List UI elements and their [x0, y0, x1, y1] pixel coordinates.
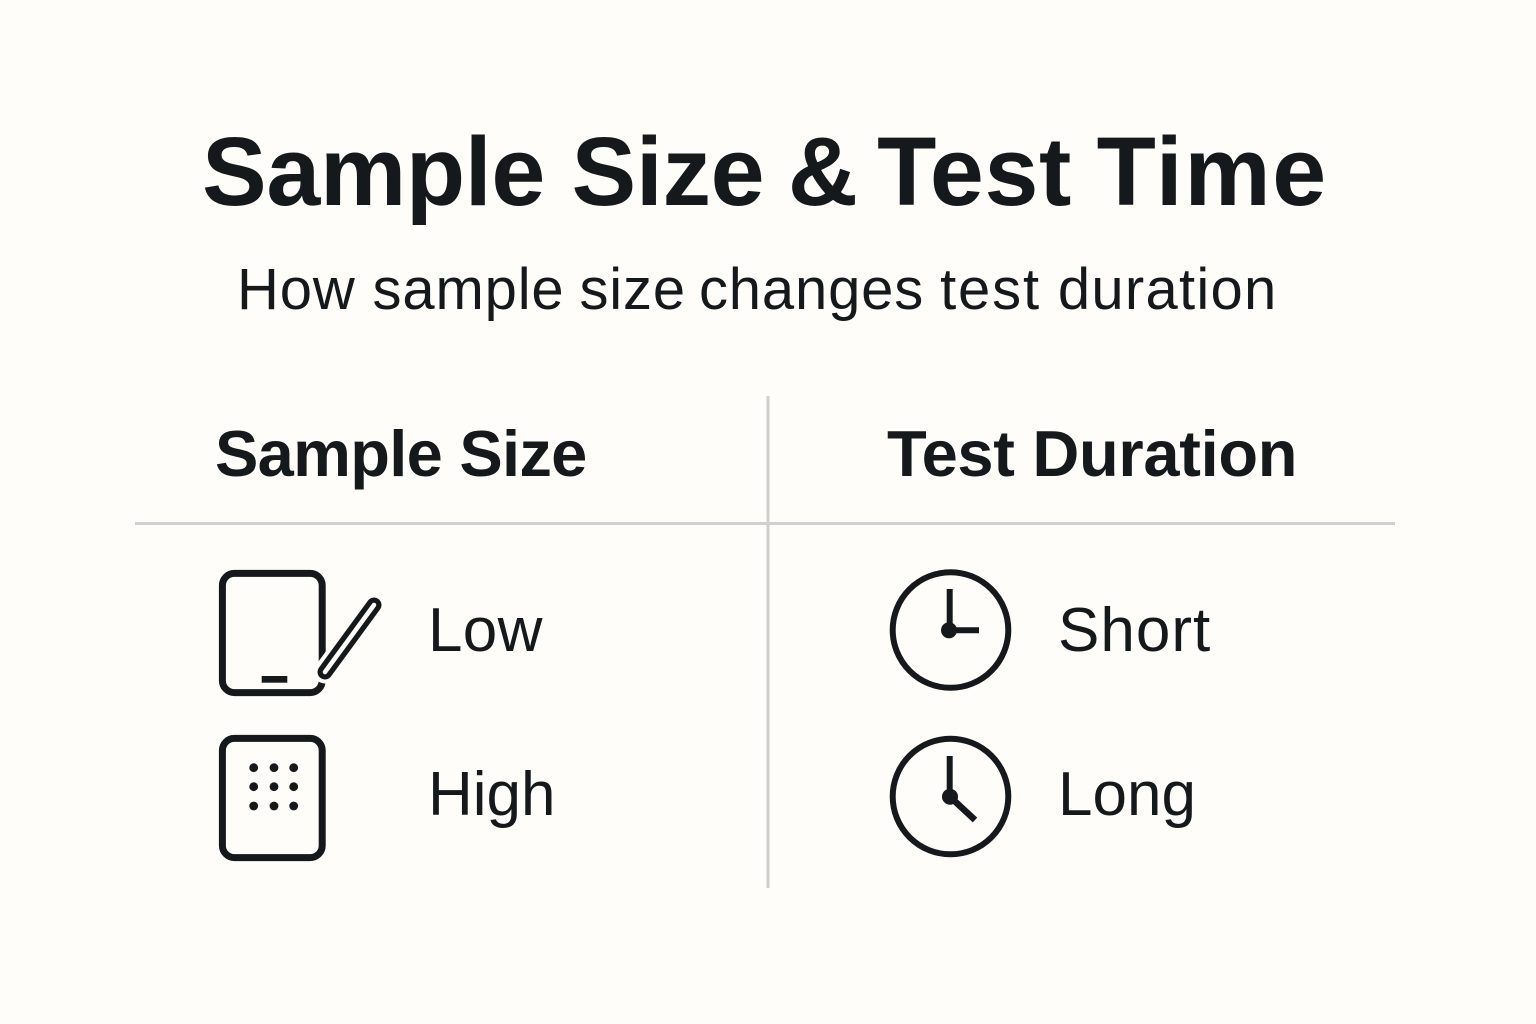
icon: low sample tablet with pencil	[222, 573, 374, 693]
label: long: Long	[1058, 760, 1196, 829]
column heading: sample size: Sample Size	[215, 417, 587, 490]
icon: short duration clock	[893, 572, 1008, 688]
label: low: Low	[428, 596, 543, 665]
subtitle: How sample size changes test duration	[237, 257, 1277, 322]
column heading: test duration: Test Duration	[887, 417, 1297, 490]
label: high: High	[428, 760, 556, 829]
icon: high sample tablet with dots	[222, 738, 322, 858]
label: short: Short	[1058, 596, 1211, 665]
title: Sample Size & Test Time	[202, 117, 1328, 226]
icon: long duration clock	[893, 739, 1008, 854]
